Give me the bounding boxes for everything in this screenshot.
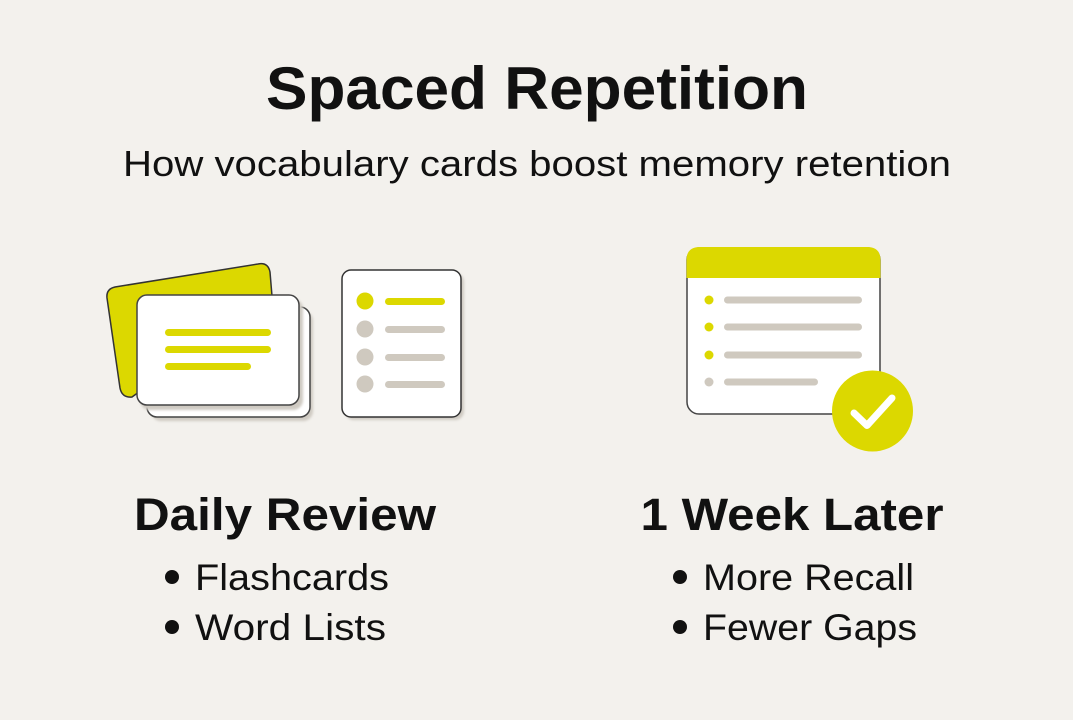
- title: Spaced Repetition: [266, 55, 808, 122]
- list: 1 week later: More Recall: [703, 557, 914, 598]
- list: 1 week later: Fewer Gaps: [703, 607, 917, 648]
- list: daily review: Flashcards: [195, 557, 389, 598]
- subtitle: How vocabulary cards boost memory retention: [123, 143, 951, 184]
- list: daily review: Word Lists: [195, 607, 386, 648]
- heading: daily review: Daily Review: [134, 489, 437, 540]
- icon: word list card: [342, 270, 464, 420]
- heading: 1 week later: 1 Week Later: [640, 489, 944, 540]
- icon: checked list window: [686, 247, 913, 452]
- list: daily review: [165, 557, 389, 648]
- icon: flashcard stack: [107, 264, 313, 421]
- list: 1 week later: [673, 557, 917, 648]
